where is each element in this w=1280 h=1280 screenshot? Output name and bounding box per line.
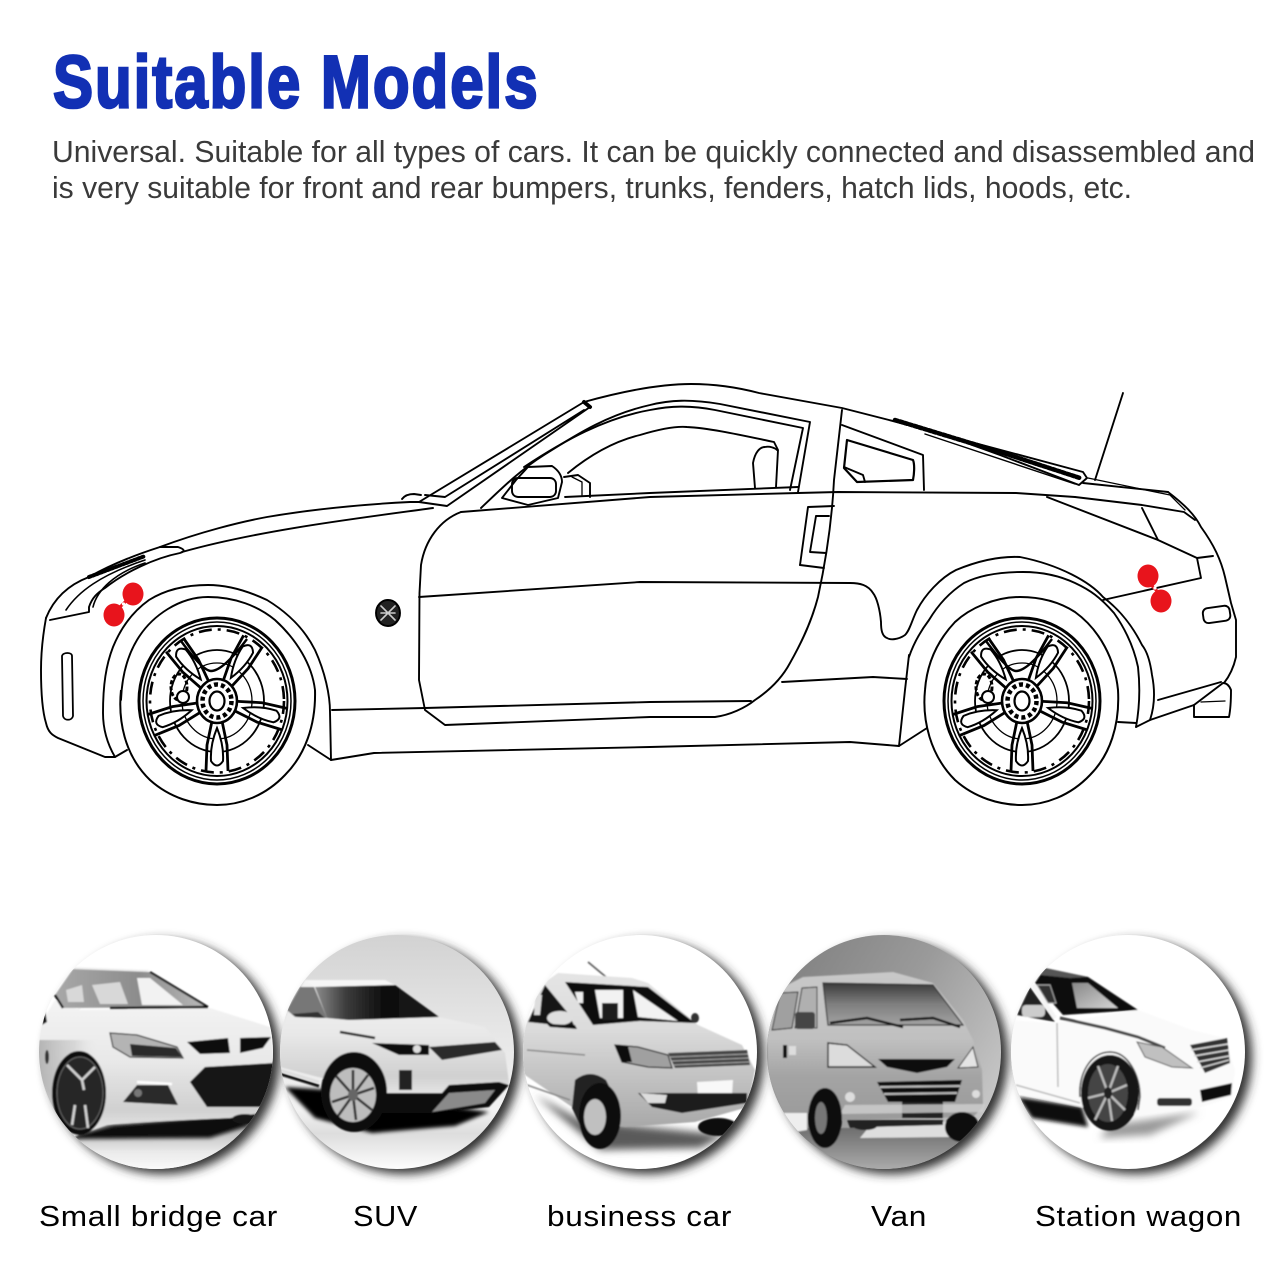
roof and windows [402, 384, 1087, 508]
antenna [1095, 393, 1123, 480]
description text: is very suitable for front and rear bumpers, trunks, fenders, hatch lids, hoods, etc. [52, 171, 1132, 205]
vehicle labels: SUV [353, 1201, 418, 1233]
rear red clip markers [1138, 564, 1172, 612]
rear tire [924, 597, 1118, 805]
vehicle labels: Van [871, 1201, 927, 1233]
side mirror [502, 466, 590, 505]
front red clip markers [104, 582, 144, 626]
description text [52, 135, 1255, 205]
title: Suitable Models [53, 42, 540, 124]
photo: station wagon [1010, 935, 1252, 1174]
vehicle labels [39, 1201, 1242, 1233]
front tire [120, 690, 315, 805]
vehicle labels: Small bridge car [39, 1201, 278, 1233]
car line drawing [41, 384, 1236, 760]
vehicle labels: business car [547, 1201, 732, 1233]
door and beltline [419, 410, 1075, 725]
front wheel rim [139, 618, 295, 784]
photo: SUV [280, 935, 521, 1174]
front air vent [62, 653, 73, 720]
description text: Universal. Suitable for all types of cars. It can be quickly connected and disassembled and [52, 135, 1255, 169]
vehicle labels: Station wagon [1035, 1201, 1242, 1233]
photo: van [767, 935, 1008, 1174]
photo: small bridge car [36, 935, 280, 1174]
car body outline [41, 478, 1236, 760]
rear wheel rim [944, 618, 1100, 784]
photo: business car [522, 935, 764, 1174]
side badge [376, 600, 400, 626]
rear reflector [1202, 605, 1231, 624]
